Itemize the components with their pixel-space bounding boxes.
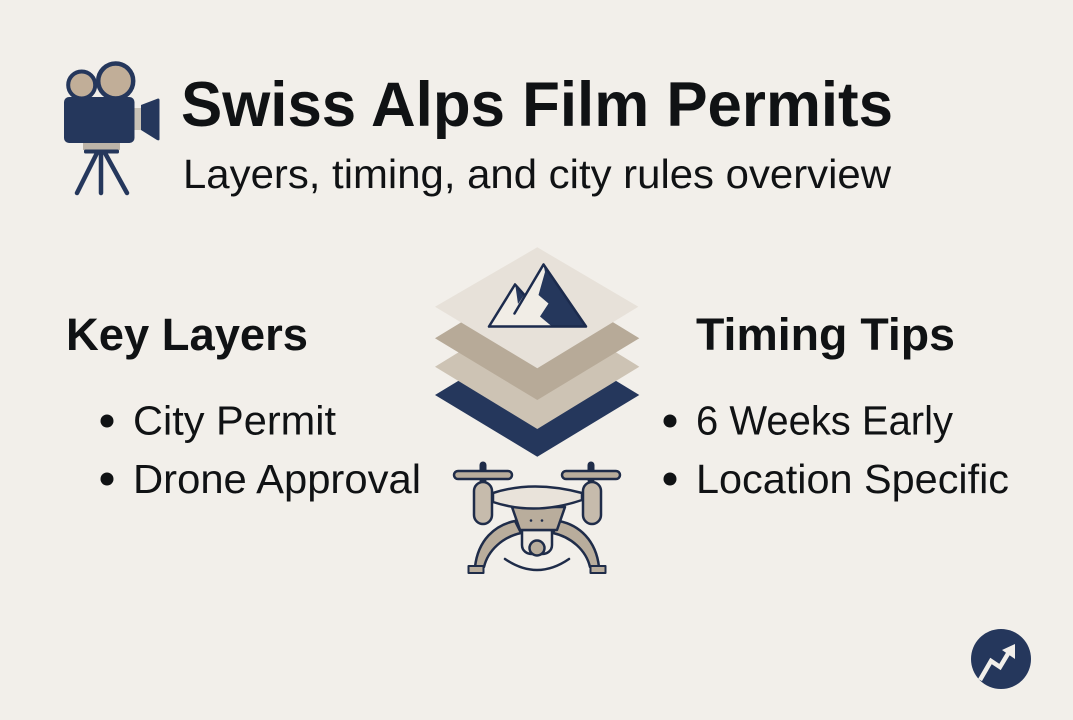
heading: key layers: Key Layers (66, 309, 308, 360)
list: key layers: City Permit (133, 398, 337, 444)
icon: growth badge (971, 629, 1031, 689)
icon: drone (454, 465, 620, 573)
icon: stacked map layers with mountain (435, 247, 639, 457)
list: timing tips (664, 398, 1009, 502)
list: key layers (100, 398, 421, 502)
heading: timing tips: Timing Tips (696, 309, 955, 360)
title: Swiss Alps Film Permits (181, 70, 893, 140)
list: timing tips: 6 Weeks Early (696, 398, 953, 444)
icon: mountain (489, 264, 586, 326)
list: key layers: Drone Approval (133, 456, 421, 502)
icon: film camera on tripod (64, 64, 160, 193)
list: timing tips: Location Specific (696, 456, 1009, 502)
subtitle: Layers, timing, and city rules overview (183, 151, 891, 197)
